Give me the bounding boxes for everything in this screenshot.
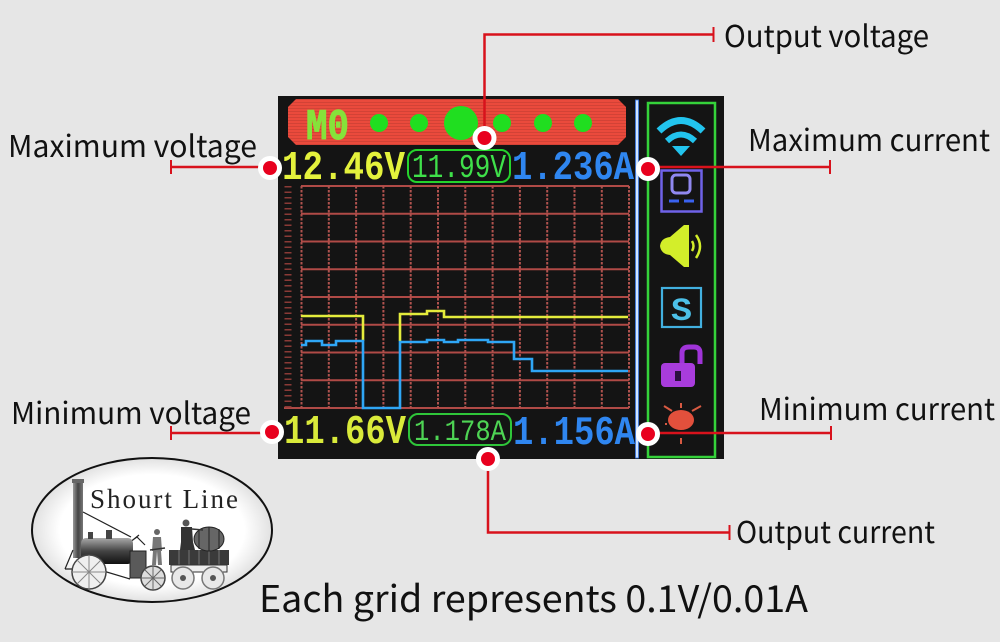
icon: open lock bbox=[661, 347, 700, 387]
callout line: output voltage bbox=[484, 27, 714, 138]
label: output voltage: Output voltage bbox=[724, 12, 929, 56]
label: minimum voltage: Minimum voltage bbox=[11, 389, 251, 433]
caption: grid scale: Each grid represents 0.1V/0.01A bbox=[259, 569, 808, 623]
maximum current reading: 1.236A bbox=[512, 146, 634, 192]
progress dots bbox=[370, 106, 592, 140]
chart: voltage and current grid bbox=[284, 186, 629, 408]
mode label: M0 bbox=[306, 103, 349, 153]
maximum voltage reading: 12.46V bbox=[282, 146, 405, 192]
logo oval bbox=[32, 458, 272, 602]
callout line: maximum voltage bbox=[171, 160, 270, 174]
panel: device screen bbox=[278, 96, 724, 459]
screen background bbox=[278, 96, 724, 459]
icon: brightness sun bbox=[664, 403, 701, 444]
icon: wifi bbox=[659, 120, 703, 156]
minimum current reading: 1.156A bbox=[513, 411, 635, 457]
logo: Shourt Line locomotive bbox=[32, 458, 272, 602]
locomotive drawing bbox=[65, 479, 229, 590]
minimum voltage reading: 11.66V bbox=[284, 410, 406, 456]
callout line: minimum current bbox=[648, 426, 831, 440]
callout line: output current bbox=[488, 459, 730, 540]
label: maximum voltage: Maximum voltage bbox=[8, 122, 257, 166]
sidebar frame bbox=[648, 103, 715, 457]
blue current trace bbox=[301, 340, 628, 408]
icon: speaker bbox=[660, 225, 700, 267]
grid lines bbox=[284, 186, 629, 408]
status bar bbox=[288, 99, 626, 153]
logo text: Shourt Line bbox=[90, 484, 238, 514]
callout line: minimum voltage bbox=[171, 426, 272, 440]
label: minimum current: Minimum current bbox=[759, 385, 995, 429]
divider line bbox=[636, 100, 638, 458]
icon: S box: S bbox=[671, 293, 692, 330]
output voltage reading: 11.99V bbox=[412, 150, 506, 187]
yellow voltage trace bbox=[301, 311, 628, 341]
icon: S box bbox=[662, 288, 701, 330]
label: maximum current: Maximum current bbox=[748, 116, 990, 160]
label: output current: Output current bbox=[736, 508, 935, 552]
marker dots bbox=[258, 126, 660, 471]
vertical scale ticks bbox=[284, 186, 292, 408]
callout line: maximum current bbox=[648, 160, 830, 174]
icon: screen profile bbox=[662, 170, 702, 212]
output current reading: 1.178A bbox=[414, 416, 506, 450]
